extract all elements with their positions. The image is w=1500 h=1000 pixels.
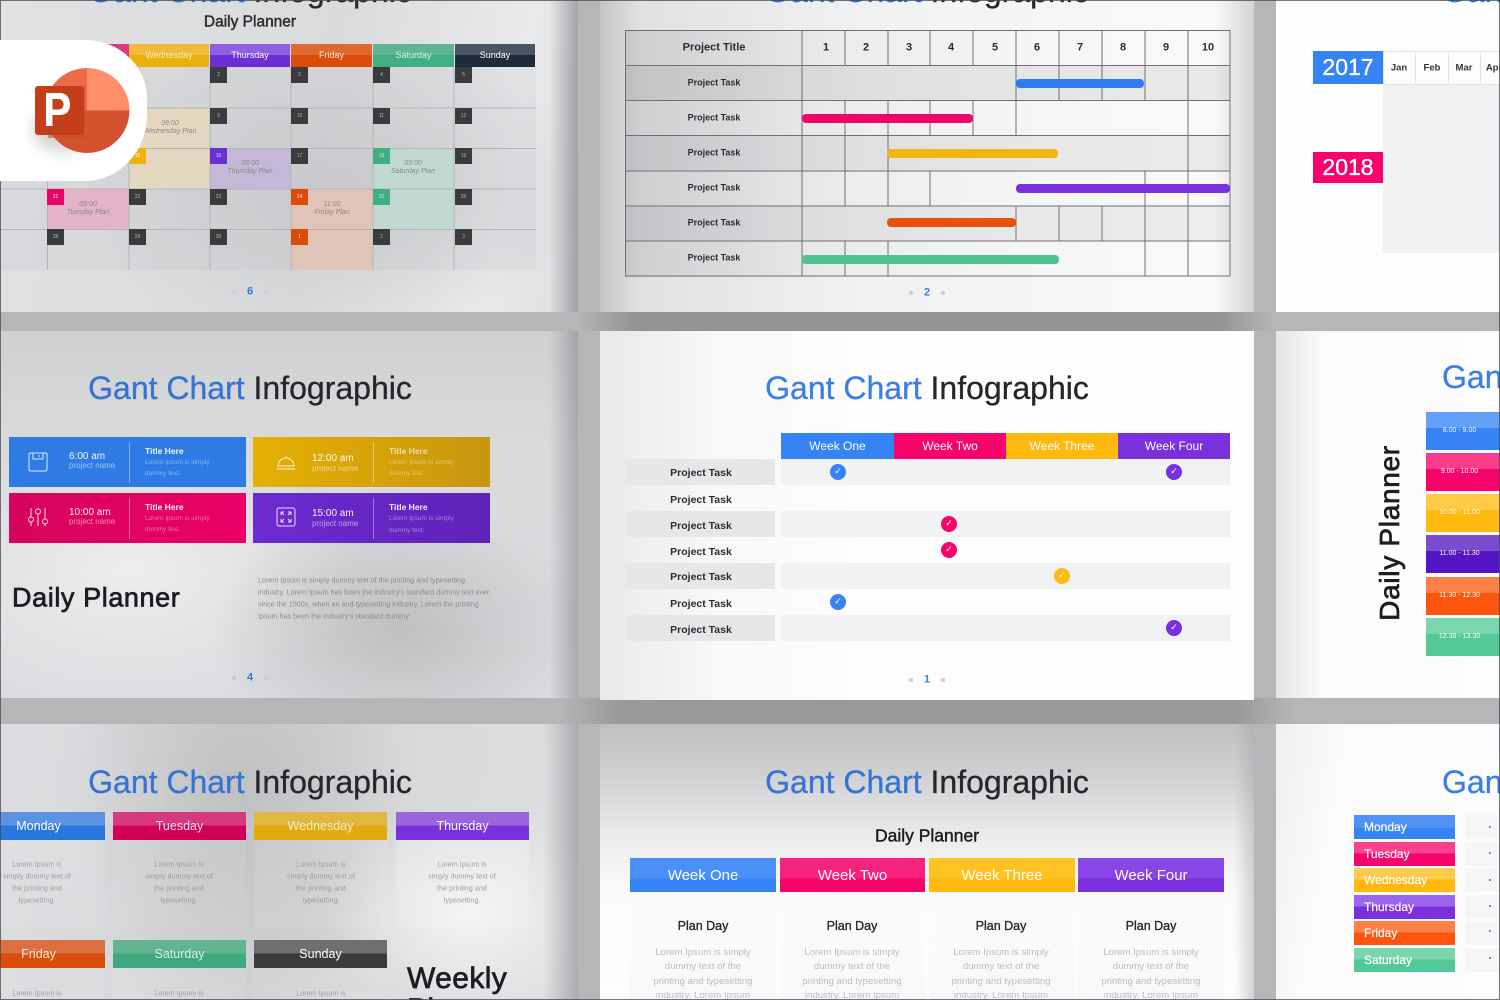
month grid xyxy=(1383,85,1500,253)
bar: purple xyxy=(1016,184,1230,193)
bar: orange xyxy=(887,218,1016,227)
card: 6:00 am xyxy=(9,437,246,487)
pagination: 4 xyxy=(247,672,253,684)
title: Gant Chart Infographic xyxy=(88,370,412,406)
header: Tuesday edge xyxy=(47,44,129,67)
plan notes: 09:00 xyxy=(404,160,422,167)
icon: sliders xyxy=(28,508,48,526)
check: week one, row one xyxy=(830,464,846,480)
check: week two, row four xyxy=(941,542,957,558)
column: Week Two: dummy text of the xyxy=(814,961,890,972)
day: Wednesday xyxy=(1354,868,1455,892)
date chips: 3 xyxy=(462,234,465,240)
day: Saturday: Saturday xyxy=(1364,953,1412,967)
column: Week One: Plan Day xyxy=(678,919,728,933)
title: Gant Chart Infographic xyxy=(88,764,412,800)
column: Week One: Lorem Ipsum is simply xyxy=(655,947,751,958)
column: Monday xyxy=(0,812,105,927)
month headers: Feb xyxy=(1424,62,1440,73)
day: Thursday: Thursday xyxy=(1364,900,1414,914)
time block: 11.30 - 12.30: 11.30 - 12.30 xyxy=(1439,592,1480,599)
day: Tuesday xyxy=(1354,842,1455,866)
column: Tuesday xyxy=(113,812,246,927)
column: Week Four: Plan Day xyxy=(1126,919,1176,933)
check: week four, row seven xyxy=(1166,620,1182,636)
check: week four, row one xyxy=(1166,464,1182,480)
panel: daily planner slide xyxy=(0,331,578,698)
panel: day list slide xyxy=(1276,724,1500,1000)
plan notes: Tuesday Plan xyxy=(67,209,109,216)
column: Week One: printing and typesetting xyxy=(653,976,753,987)
card: 6:00 am: Lorem Ipsum is simply xyxy=(145,459,210,466)
date chips: 22 xyxy=(135,194,140,200)
task labels: Project Task xyxy=(670,624,732,636)
bar: blue xyxy=(1016,79,1144,88)
date chips xyxy=(47,67,472,245)
column: Thursday: Lorem Ipsum is xyxy=(437,862,487,868)
column: Tuesday: simply dummy text of xyxy=(145,874,213,880)
task labels: Project Task xyxy=(688,252,740,262)
pagination: 2 xyxy=(924,286,930,298)
task labels: Project Task xyxy=(670,520,732,532)
column: Week Two: Plan Day xyxy=(827,919,877,933)
date chips: 21 xyxy=(53,194,58,200)
header: Week One: Week One xyxy=(809,439,866,453)
heading: Daily Planner xyxy=(12,582,180,612)
column: Friday: Friday xyxy=(21,947,56,961)
panel: gantt table slide xyxy=(600,0,1254,312)
table header labels: 7 xyxy=(1077,42,1083,54)
subtitle: Daily Planner xyxy=(204,13,296,30)
date chips: 15 xyxy=(135,153,140,159)
date chips: 29 xyxy=(135,234,140,240)
day: Friday: Friday xyxy=(1364,926,1397,940)
time block: 9.00 - 10.00 xyxy=(1426,453,1500,491)
header: Week Three: Week Three xyxy=(1030,439,1094,453)
icon: cloche xyxy=(277,456,295,470)
time block: 12.30 - 13.30 xyxy=(1426,618,1500,656)
table header labels xyxy=(683,42,1214,54)
day: Thursday xyxy=(1354,895,1455,919)
header: Week Two: Week Two xyxy=(922,439,978,453)
date chips: 23 xyxy=(216,194,221,200)
column: Tuesday: Lorem Ipsum is xyxy=(154,862,204,868)
date chips: 10 xyxy=(297,113,302,119)
task labels: Project Task xyxy=(688,182,740,192)
column: Saturday: Saturday xyxy=(154,947,205,961)
card: 10:00 am: Title Here xyxy=(145,502,184,512)
pagination: 1 xyxy=(924,674,930,686)
day: Friday xyxy=(1354,921,1455,945)
check: week three, row five: ✓ xyxy=(1058,571,1066,581)
header: Saturday: Saturday xyxy=(395,50,432,60)
column: Tuesday: the printing and xyxy=(154,886,204,892)
column: Thursday xyxy=(396,812,529,927)
time block: 8.00 - 9.00: 8.00 - 9.00 xyxy=(1443,427,1476,434)
time block: 10.00 - 11.00: 10.00 - 11.00 xyxy=(1439,509,1480,516)
title: Gant Chart Infographic xyxy=(765,370,1089,406)
plan notes: Wednesday Plan xyxy=(144,128,196,135)
card: 15:00 am: dummy text. xyxy=(389,527,424,534)
panel: weekly columns slide xyxy=(0,724,578,1000)
date chips: 2 xyxy=(380,234,383,240)
gantt table xyxy=(625,30,1230,277)
table row shading xyxy=(625,30,1231,277)
table header labels: 8 xyxy=(1120,42,1126,54)
card: 10:00 am: Lorem Ipsum is simply xyxy=(145,515,210,522)
body text: since the 1500s, when an and typesetting industry. Lorem the printing xyxy=(258,599,479,608)
date chips: 4 xyxy=(380,72,383,78)
column: Sunday xyxy=(254,940,387,1000)
date chips: 16 xyxy=(216,153,221,159)
card: 12:00 am: Lorem Ipsum is simply xyxy=(389,459,454,466)
panel: year timeline slide xyxy=(1276,0,1500,312)
check: week two, row three xyxy=(941,516,957,532)
header: Thursday: Thursday xyxy=(231,50,269,60)
day: Monday xyxy=(1354,815,1455,839)
column: Week One xyxy=(630,858,776,1000)
panel: plan day slide xyxy=(600,724,1254,1000)
date chips: 28 xyxy=(53,234,58,240)
icon: expand xyxy=(276,508,296,526)
column: Week Three: dummy text of the xyxy=(963,961,1039,972)
date chips: 25 xyxy=(379,194,384,200)
table header labels: 9 xyxy=(1163,42,1169,54)
task labels: Project Task xyxy=(670,467,732,479)
table header labels: 10 xyxy=(1202,42,1214,54)
check: week four, row one: ✓ xyxy=(1170,467,1178,477)
month headers xyxy=(1383,51,1500,85)
day: Monday: Monday xyxy=(1364,820,1407,834)
card: 12:00 am: 12:00 am xyxy=(312,453,354,464)
card: 6:00 am: dummy text. xyxy=(145,470,180,477)
column: Wednesday: Lorem Ipsum is xyxy=(296,862,346,868)
column: Sunday: Sunday xyxy=(299,947,342,961)
column: Week Three: Week Three xyxy=(961,867,1043,884)
column: Week Two xyxy=(780,858,925,1000)
column: Wednesday: the printing and xyxy=(296,886,346,892)
card: 15:00 am: 15:00 am xyxy=(312,508,354,519)
body text: industry. Lorem Ipsum has been the industry's standard dummy text ever xyxy=(258,587,489,596)
body text: Lorem Ipsum is simply dummy text of the printing and typesetting xyxy=(258,575,465,584)
table header labels: 6 xyxy=(1034,42,1040,54)
task labels: Project Task xyxy=(688,112,740,122)
card: 10:00 am: project name xyxy=(69,517,115,526)
check: week one, row six: ✓ xyxy=(834,597,842,607)
header: Wednesday: Wednesday xyxy=(145,50,193,60)
table header labels: 3 xyxy=(906,42,912,54)
column: Week One: Week One xyxy=(668,867,738,884)
task labels: Project Task xyxy=(670,598,732,610)
time block: 10.00 - 11.00 xyxy=(1426,494,1500,532)
card: 12:00 am: dummy text. xyxy=(389,470,424,477)
column: Week Four: Lorem Ipsum is simply xyxy=(1103,947,1199,958)
PowerPoint badge xyxy=(0,40,147,181)
time block: 8.00 - 9.00 xyxy=(1426,412,1500,450)
check: week one, row one: ✓ xyxy=(834,467,842,477)
column: Saturday xyxy=(113,940,246,1000)
date chips: 30 xyxy=(216,234,221,240)
time block: 9.00 - 10.00: 9.00 - 10.00 xyxy=(1441,468,1478,475)
column: Thursday: typesetting. xyxy=(444,898,480,904)
month headers: Jan xyxy=(1391,62,1407,73)
date chips: 26 xyxy=(461,194,466,200)
table header labels: 1 xyxy=(823,42,829,54)
card: 10:00 am: 10:00 am xyxy=(69,507,111,518)
card: 12:00 am xyxy=(253,437,490,487)
plan notes: 09:00 xyxy=(161,120,179,127)
task labels: Project Task xyxy=(688,148,740,158)
task labels: Project Task xyxy=(670,571,732,583)
row strips xyxy=(644,459,1230,641)
column: Thursday: Thursday xyxy=(436,819,489,833)
column: Week Two: printing and typesetting xyxy=(802,976,902,987)
column: Wednesday: simply dummy text of xyxy=(287,874,355,880)
column: Wednesday xyxy=(254,812,387,927)
column: Thursday: the printing and xyxy=(437,886,487,892)
plan notes xyxy=(67,120,435,216)
plan notes: 09:00 xyxy=(241,160,259,167)
column: Week Four: printing and typesetting xyxy=(1101,976,1201,987)
date chips: 3 xyxy=(298,72,301,78)
date chips: 12 xyxy=(461,113,466,119)
year: 2017 xyxy=(1313,51,1383,84)
column: Week Four: dummy text of the xyxy=(1113,961,1189,972)
calendar cell tints xyxy=(48,67,533,270)
bar: yellow xyxy=(887,149,1058,158)
task labels xyxy=(688,78,740,262)
table header labels: Project Title xyxy=(683,42,745,54)
check: week one, row six xyxy=(830,594,846,610)
calendar xyxy=(0,44,536,270)
day: Saturday xyxy=(1354,948,1455,972)
date chips: 11 xyxy=(379,113,384,119)
time block: 12.30 - 13.30: 12.30 - 13.30 xyxy=(1439,633,1480,640)
bar: pink xyxy=(802,114,973,123)
detail strips xyxy=(1489,826,1491,959)
icon: floppy disk xyxy=(28,452,48,472)
column: Monday: typesetting. xyxy=(18,898,56,904)
card: 6:00 am: 6:00 am xyxy=(69,451,105,462)
body text xyxy=(258,575,490,620)
header: Wednesday xyxy=(129,44,209,67)
column: Friday: Lorem Ipsum is xyxy=(12,990,62,998)
column: Week One: dummy text of the xyxy=(665,961,741,972)
date chips: 5 xyxy=(462,72,465,78)
panel: time blocks slide xyxy=(1276,331,1500,698)
check: week two, row three: ✓ xyxy=(945,519,953,529)
task labels xyxy=(670,467,732,636)
date chips: 2 xyxy=(217,72,220,78)
plan notes: Thursday Plan xyxy=(227,168,273,175)
plan notes: Friday Plan xyxy=(314,209,350,216)
header: Friday: Friday xyxy=(319,50,344,60)
column: Sunday: Lorem Ipsum is xyxy=(296,990,346,998)
column: Wednesday: Wednesday xyxy=(288,819,353,833)
column: Week Four xyxy=(1078,858,1224,1000)
card: 10:00 am xyxy=(9,493,246,543)
card: 15:00 am: Lorem Ipsum is simply xyxy=(389,515,454,522)
card: 12:00 am: project name xyxy=(312,464,358,473)
header: Sunday xyxy=(455,44,535,67)
table header labels: 2 xyxy=(863,42,869,54)
date chips: 9 xyxy=(217,113,220,119)
icon: PowerPoint logo xyxy=(28,68,130,157)
card: 15:00 am xyxy=(253,493,490,543)
time block: 11.30 - 12.30 xyxy=(1426,577,1500,615)
subtitle: Daily Planner xyxy=(875,825,979,845)
column: Thursday: simply dummy text of xyxy=(428,874,496,880)
header: Week One xyxy=(781,433,894,459)
card: 6:00 am: project name xyxy=(69,461,115,470)
column: Week Three: Plan Day xyxy=(976,919,1026,933)
column: Week Two: Lorem Ipsum is simply xyxy=(804,947,900,958)
shadow below weekly slide xyxy=(560,698,1294,724)
date chips: 18 xyxy=(379,153,384,159)
card: 15:00 am: project name xyxy=(312,519,358,528)
card: 10:00 am: dummy text. xyxy=(145,526,180,533)
plan notes: 11:00 xyxy=(324,201,340,208)
header: Saturday xyxy=(373,44,454,67)
table header labels: 4 xyxy=(948,42,954,54)
date chips: 17 xyxy=(297,153,302,159)
header: Week Four xyxy=(1118,433,1230,459)
date chips: 1 xyxy=(298,234,301,240)
panel: calendar slide xyxy=(0,0,578,312)
header: Sunday: Sunday xyxy=(480,50,510,60)
column: Saturday: Lorem Ipsum is xyxy=(154,990,204,998)
card: 15:00 am: Title Here xyxy=(389,502,428,512)
column: Monday: the printing and xyxy=(12,886,62,892)
header: Friday xyxy=(291,44,372,67)
year: 2017: 2017 xyxy=(1322,54,1374,80)
column: Week Three xyxy=(929,858,1075,1000)
date chips: 24 xyxy=(297,194,302,200)
column: Monday: Lorem Ipsum is xyxy=(12,862,62,868)
column: Tuesday: typesetting. xyxy=(160,898,198,904)
year: 2018: 2018 xyxy=(1322,154,1374,180)
title: Gant Chart Infographic xyxy=(765,764,1089,800)
check: week three, row five xyxy=(1054,568,1070,584)
day: Wednesday: Wednesday xyxy=(1364,873,1427,887)
panel: weekly check table slide xyxy=(600,331,1254,700)
time block: 11.00 - 11.30: 11.00 - 11.30 xyxy=(1439,550,1480,557)
table header labels: 5 xyxy=(992,42,998,54)
task labels: Project Task xyxy=(670,494,732,506)
body text: Ipsum has been the industry's standard dummy xyxy=(258,611,409,620)
column: Monday: simply dummy text of xyxy=(3,874,71,880)
plan notes: Saturday Plan xyxy=(391,168,435,175)
check: week four, row seven: ✓ xyxy=(1170,623,1178,633)
bar: green xyxy=(802,255,1059,264)
check: week two, row four: ✓ xyxy=(945,545,953,555)
column: Week Three: Lorem Ipsum is simply xyxy=(953,947,1049,958)
column: Week Three: printing and typesetting xyxy=(951,976,1051,987)
header: Week Three xyxy=(1006,433,1118,459)
task labels: Project Task xyxy=(670,546,732,558)
column: Tuesday: Tuesday xyxy=(156,819,203,833)
column: Monday: Monday xyxy=(16,819,61,833)
pagination: 6 xyxy=(247,286,253,298)
column: Week Two: Week Two xyxy=(818,867,887,884)
date chips: 19 xyxy=(461,153,466,159)
task labels: Project Task xyxy=(688,78,740,88)
year: 2018 xyxy=(1313,152,1383,183)
column: Friday xyxy=(0,940,105,1000)
rotated heading: Daily Planner xyxy=(1374,445,1405,621)
column: Wednesday: typesetting. xyxy=(302,898,340,904)
header: Week Two xyxy=(894,433,1006,459)
header: Thursday xyxy=(210,44,290,67)
card: 12:00 am: Title Here xyxy=(389,446,428,456)
column: Week Four: Week Four xyxy=(1114,867,1188,884)
time block: 11.00 - 11.30 xyxy=(1426,535,1500,573)
header: Week Four: Week Four xyxy=(1145,439,1203,453)
month headers: Mar xyxy=(1456,62,1472,73)
task labels: Project Task xyxy=(688,218,740,228)
shadow below gantt slide xyxy=(578,312,1276,331)
plan notes: 09:00 xyxy=(79,201,97,208)
card: 6:00 am: Title Here xyxy=(145,446,184,456)
day: Tuesday: Tuesday xyxy=(1364,847,1410,861)
